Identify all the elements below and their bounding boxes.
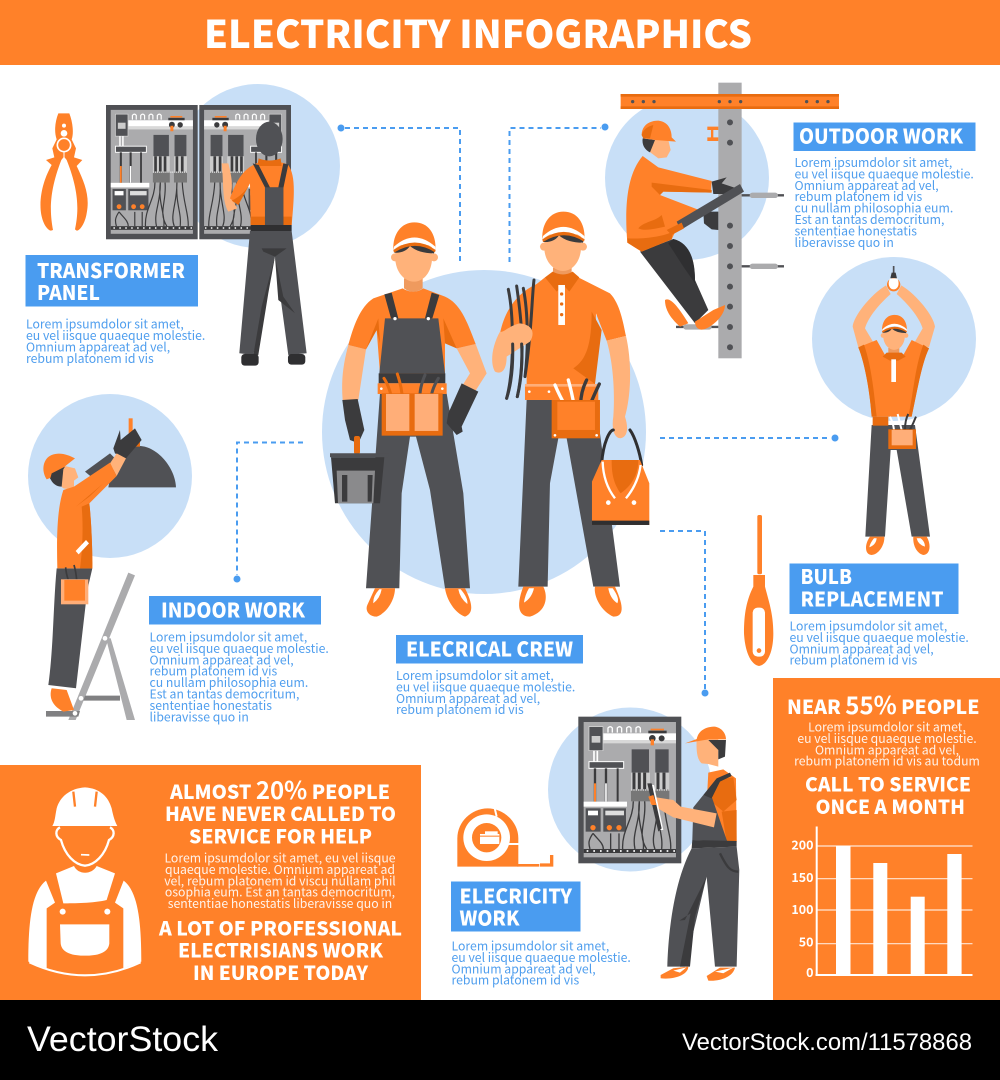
text: electricity work: Lorem ipsumdolor sit amet, [452, 936, 609, 954]
electricity work: cabinet and worker [457, 717, 739, 981]
statistic subheading: ONCE A MONTH [816, 791, 965, 820]
connector lines [234, 124, 838, 696]
watermark bar [0, 1000, 1000, 1080]
text: transformer panel: Omnium appareat ad vel, [26, 337, 170, 355]
text: indoor work: Lorem ipsumdolor sit amet, [150, 628, 307, 646]
text: electrical crew: Omnium appareat ad vel, [396, 689, 540, 707]
statistic headline: ALMOST 20% PEOPLE [169, 771, 390, 806]
statistic body text: Omnium appareat ad vel, [815, 740, 959, 758]
text: outdoor work: sententiae honestatis [794, 221, 917, 239]
statistic footer headline: IN EUROPE TODAY [193, 957, 369, 986]
electrical cabinet: left door [106, 105, 198, 239]
statistic body text: sententiae honestatis liberavisse quo in [168, 894, 392, 912]
bar chart [791, 826, 972, 981]
statistic headline [165, 771, 396, 850]
text: transformer panel: rebum platonem id vis [26, 349, 154, 367]
bar chart: 50 [799, 932, 814, 950]
heading: transformer panel: PANEL [37, 277, 100, 306]
text: outdoor work: rebum platonem id vis [794, 187, 922, 205]
text: indoor work: sententiae honestatis [150, 696, 272, 714]
icon: pliers [40, 113, 88, 231]
heading: bulb replacement: BULB [800, 561, 852, 590]
statistic body text: Lorem ipsumdolor sit amet, [808, 718, 966, 736]
statistic headline: SERVICE FOR HELP [189, 820, 372, 850]
text: bulb replacement: Omnium appareat ad vel, [790, 639, 934, 657]
statistic body text: osophia eum. Est an tantas democritum, [165, 883, 395, 901]
title banner: ELECTRICITY INFOGRAPHICS [204, 4, 752, 59]
watermark bar: VectorStock.com/11578868 [682, 1029, 972, 1056]
statistic subheading [805, 768, 971, 820]
text: indoor work: Omnium appareat ad vel, [150, 650, 294, 668]
text: transformer panel: eu vel iisque quaeque molestie. [26, 326, 205, 344]
icon: tape measure [457, 807, 553, 867]
text: transformer panel: Lorem ipsumdolor sit amet, [26, 314, 184, 332]
heading: indoor work: INDOOR WORK [161, 594, 306, 624]
right worker [492, 212, 649, 617]
left worker [330, 222, 487, 617]
text: bulb replacement: eu vel iisque quaeque molestie. [790, 628, 969, 646]
bar chart: 100 [791, 899, 814, 918]
heading: electricity work: ELECRICITY [460, 880, 573, 910]
statistic footer headline [158, 912, 402, 986]
statistic body text: eu vel iisque quaeque molestie. [797, 729, 977, 747]
text: electricity work: eu vel iisque quaeque molestie. [452, 948, 631, 966]
background circles [28, 84, 976, 872]
text: indoor work: liberavisse quo in [150, 707, 249, 725]
text: indoor work: rebum platonem id vis [150, 662, 277, 680]
text: outdoor work: liberavisse quo in [794, 233, 894, 251]
worker [43, 428, 142, 712]
electrical cabinet: right door [199, 105, 291, 239]
heading: transformer panel: TRANSFORMER [37, 255, 185, 284]
heading: outdoor work: OUTDOOR WORK [799, 120, 964, 150]
title banner [0, 0, 1000, 65]
text: outdoor work: cu nullam philosophia eum. [794, 199, 953, 217]
statistic body text: quaeque molestie. Omnium appareat ad [165, 860, 395, 878]
tool bag [592, 430, 649, 525]
text: electricity work: Omnium appareat ad vel, [452, 959, 596, 977]
text: bulb replacement: Lorem ipsumdolor sit amet, [790, 616, 947, 634]
statistic footer headline: A LOT OF PROFESSIONAL [158, 912, 402, 942]
heading: electrical crew: ELECRICAL CREW [406, 634, 573, 662]
text: electricity work: rebum platonem id vis [452, 971, 579, 989]
indoor work worker with lamp and ladder [43, 418, 176, 720]
worker [647, 727, 739, 981]
bar chart: 200 [791, 834, 814, 854]
panel: 55% statistic and bar chart [773, 678, 1000, 1000]
text: indoor work: eu vel iisque quaeque molestie. [150, 639, 329, 657]
text: indoor work: Est an tantas democritum, [150, 684, 299, 702]
ceiling lamp [108, 418, 176, 487]
icon: white electrician [28, 787, 141, 975]
toolbox [330, 436, 389, 503]
statistic headline: NEAR 55% PEOPLE [787, 686, 979, 721]
bundled cables [507, 280, 534, 398]
text: electrical crew: rebum platonem id vis [396, 700, 524, 718]
heading: electricity work: WORK [460, 902, 520, 932]
icon: screwdriver [744, 515, 773, 666]
back-view worker [222, 122, 307, 366]
heading: bulb replacement: REPLACEMENT [800, 584, 944, 612]
text: outdoor work: eu vel iisque quaeque molestie. [794, 164, 974, 182]
electrical crew figures [330, 212, 649, 617]
ladder [46, 573, 135, 720]
bar chart: 150 [791, 867, 814, 886]
pole [621, 83, 839, 358]
light bulb [887, 266, 900, 291]
statistic headline: HAVE NEVER CALLED TO [165, 798, 396, 827]
text: outdoor work: Est an tantas democritum, [794, 210, 944, 228]
panel: 20% statistic [0, 765, 421, 1000]
statistic body text: vel, rebum platonem id viscu nullam phil [164, 871, 396, 889]
text: electrical crew: eu vel iisque quaeque molestie. [396, 677, 575, 695]
heading: bulb replacement [790, 561, 958, 614]
text: bulb replacement: rebum platonem id vis [790, 651, 917, 669]
pole and climbing worker [621, 83, 839, 358]
watermark bar: VectorStock [27, 1020, 219, 1059]
bar chart: 0 [806, 962, 814, 981]
statistic subheading: CALL TO SERVICE [805, 768, 971, 798]
bulb replacement worker [853, 266, 935, 555]
climbing worker [626, 121, 744, 330]
text: outdoor work: Lorem ipsumdolor sit amet, [794, 153, 952, 171]
text: electrical crew: Lorem ipsumdolor sit amet, [396, 666, 554, 684]
heading: transformer panel [26, 255, 198, 306]
statistic footer headline: ELECTRISIANS WORK [178, 934, 383, 964]
statistic body text: rebum platonem id vis au todum [794, 752, 980, 770]
text: outdoor work: Omnium appareat ad vel, [794, 176, 939, 194]
text: indoor work: cu nullam philosophia eum. [150, 673, 308, 691]
heading: electricity work [451, 880, 580, 932]
statistic body text: Lorem ipsumdolor sit amet, eu vel iisque [164, 848, 396, 866]
